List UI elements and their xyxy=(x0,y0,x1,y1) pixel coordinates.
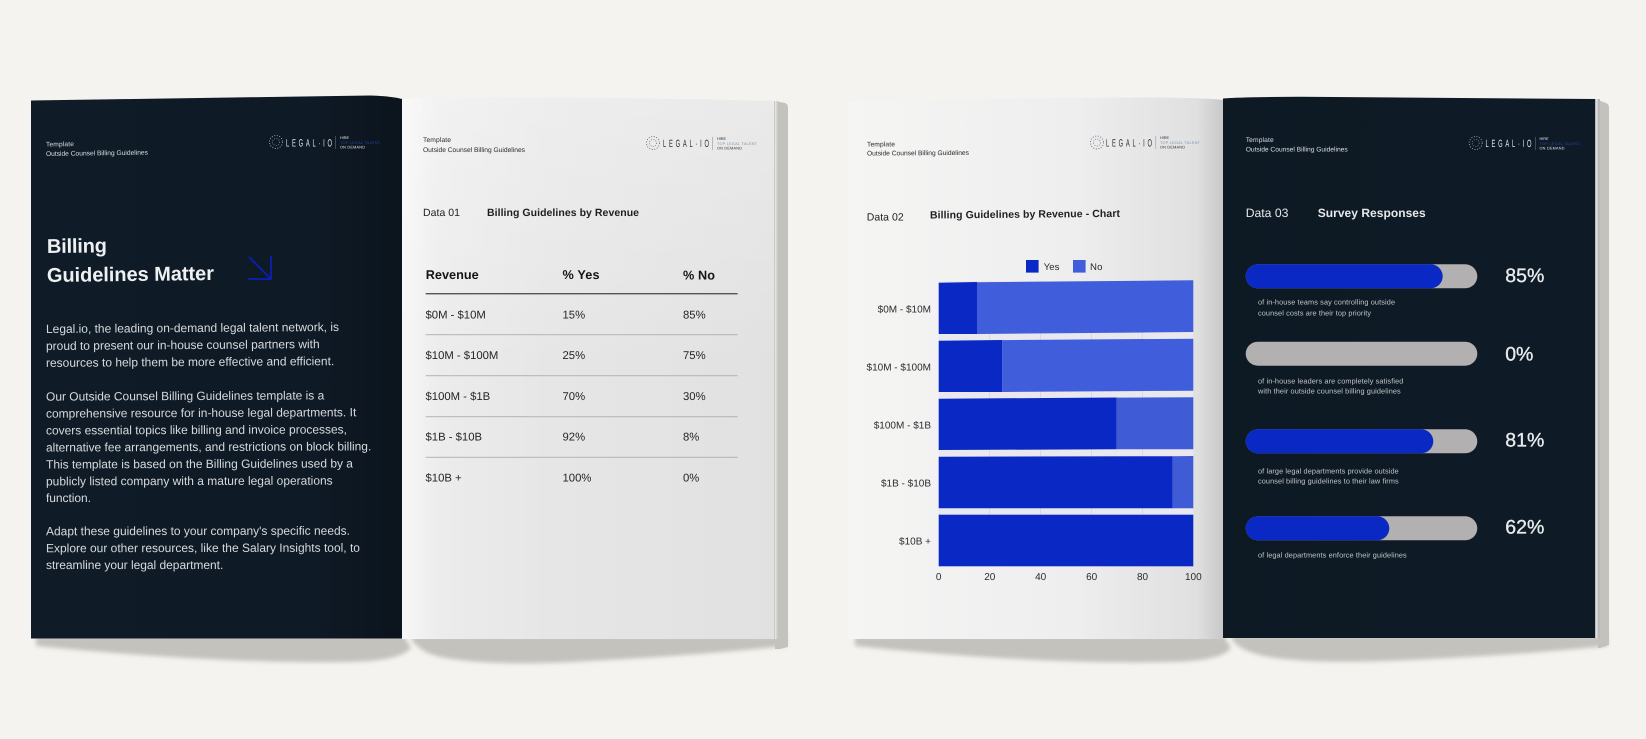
bar: $10M - $100M xyxy=(939,339,1193,392)
category labels: $0M - $10M xyxy=(878,305,931,316)
shadow: spread 2 xyxy=(855,100,1609,662)
heading: Guidelines Matter xyxy=(47,263,214,287)
logo xyxy=(270,136,381,150)
category labels: $100M - $1B xyxy=(874,421,931,432)
table: billing guidelines by revenue: % No xyxy=(683,268,715,282)
table: billing guidelines by revenue: % Yes xyxy=(562,268,600,282)
bar: $0M - $10M xyxy=(939,280,1193,334)
text block: intro: Explore our other resources, like the Salary Insights tool, to xyxy=(46,541,360,555)
x axis labels: 0 xyxy=(936,572,942,583)
logo: TOP LEGAL TALENT xyxy=(717,142,758,146)
table: billing guidelines by revenue: 70% xyxy=(562,391,585,403)
logo: HIRE xyxy=(1160,136,1169,140)
page header text xyxy=(1246,137,1348,154)
stat: 85%: of in-house teams say controlling outside xyxy=(1258,298,1395,307)
logo: LEGAL·IO xyxy=(663,138,709,150)
stat: 0%: 0% xyxy=(1505,344,1533,366)
text block: intro: Adapt these guidelines to your company's specific needs. xyxy=(46,524,350,538)
table: billing guidelines by revenue: $100M - $1B xyxy=(426,391,490,403)
page header text: Outside Counsel Billing Guidelines xyxy=(46,150,149,158)
x axis labels xyxy=(936,572,1202,583)
logo: HIRE xyxy=(1540,137,1549,141)
logo: LEGAL·IO xyxy=(1106,138,1152,150)
logo: ON DEMAND xyxy=(340,146,365,150)
logo xyxy=(1469,136,1580,150)
logo xyxy=(1090,136,1201,150)
page header text: Template xyxy=(46,141,74,148)
bar: $1B - $10B xyxy=(939,456,1193,508)
text block: intro: proud to present our in-house counsel partners with xyxy=(46,337,320,353)
section heading: Survey Responses xyxy=(1318,206,1426,220)
logo: ON DEMAND xyxy=(1160,146,1185,150)
logo: HIRE xyxy=(340,136,349,140)
x axis labels: 80 xyxy=(1137,572,1148,583)
table: billing guidelines by revenue: 100% xyxy=(562,473,591,485)
stat: 62% xyxy=(1246,516,1544,560)
stat: 0%: with their outside counsel billing guidelines xyxy=(1257,386,1401,395)
section heading: Data 01 xyxy=(423,207,460,219)
heading: Billing xyxy=(47,235,107,258)
bar: $100M - $1B xyxy=(939,397,1193,450)
panel: dark intro page xyxy=(31,96,402,638)
category labels xyxy=(867,305,931,547)
logo: TOP LEGAL TALENT, xyxy=(1540,142,1580,146)
text block: intro: function. xyxy=(46,491,91,505)
table: billing guidelines by revenue: 25% xyxy=(562,350,585,362)
table: billing guidelines by revenue: 0% xyxy=(683,473,699,485)
stat: 0%: of in-house leaders are completely satisfied xyxy=(1258,376,1403,385)
section heading: Data 03 xyxy=(1246,206,1289,220)
category labels: $10B + xyxy=(899,536,931,547)
page header text xyxy=(46,141,149,158)
table: billing guidelines by revenue: $1B - $10B xyxy=(426,432,482,444)
page header text: Outside Counsel Billing Guidelines xyxy=(867,150,970,157)
text block: intro: alternative fee arrangements, and restrictions on block billing. xyxy=(46,439,371,455)
page header text: Outside Counsel Billing Guidelines xyxy=(423,147,526,154)
stat: 81%: counsel billing guidelines to their law firms xyxy=(1258,476,1399,485)
chart plot background xyxy=(939,281,1193,566)
legend xyxy=(1026,260,1102,273)
table: billing guidelines by revenue: 15% xyxy=(562,310,585,322)
stat: 85%: 85% xyxy=(1505,265,1544,287)
text block: intro: streamline your legal department. xyxy=(46,558,223,572)
x axis labels: 100 xyxy=(1185,572,1202,583)
section heading: Billing Guidelines by Revenue xyxy=(487,207,639,219)
stat: 62%: of legal departments enforce their guidelines xyxy=(1258,551,1407,560)
bar: $10B + xyxy=(939,515,1193,566)
page header text: Template xyxy=(423,137,451,144)
table: billing guidelines by revenue: $10B + xyxy=(426,473,462,485)
x axis labels: 40 xyxy=(1035,572,1047,583)
x axis labels: 20 xyxy=(984,572,996,583)
panel: revenue table page xyxy=(402,97,778,639)
icon: arrow xyxy=(248,256,271,279)
table: billing guidelines by revenue: $10M - $100M xyxy=(426,350,498,362)
panel: survey responses page xyxy=(1223,97,1600,639)
table: billing guidelines by revenue xyxy=(426,268,738,485)
logo: ON DEMAND xyxy=(1540,146,1565,150)
text block: intro xyxy=(46,320,371,572)
stat: 62%: 62% xyxy=(1505,516,1544,538)
shadow: spread 1 xyxy=(36,101,788,663)
logo: TOP LEGAL TALENT, xyxy=(340,141,381,145)
section heading: Billing Guidelines by Revenue - Chart xyxy=(930,208,1121,221)
chart: stacked bars by revenue xyxy=(867,260,1202,583)
text block: intro: Our Outside Counsel Billing Guidelines template is a xyxy=(46,388,325,404)
stat: 81%: of large legal departments provide outside xyxy=(1258,466,1399,475)
logo: TOP LEGAL TALENT xyxy=(1160,141,1201,145)
text block: intro: publicly listed company with a mature legal operations xyxy=(46,474,333,488)
category labels: $1B - $10B xyxy=(881,479,931,490)
text block: intro: Legal.io, the leading on-demand legal talent network, is xyxy=(46,320,339,336)
page header text xyxy=(423,137,526,154)
x axis labels: 60 xyxy=(1086,572,1098,583)
page header text: Outside Counsel Billing Guidelines xyxy=(1246,147,1348,154)
logo: LEGAL·IO xyxy=(286,138,332,150)
logo: LEGAL·IO xyxy=(1486,138,1531,150)
stat: 0% xyxy=(1246,342,1533,395)
table: billing guidelines by revenue: 8% xyxy=(683,432,699,444)
section heading xyxy=(1246,206,1426,220)
table: billing guidelines by revenue: 30% xyxy=(683,391,706,403)
page header text xyxy=(867,141,970,157)
section heading: Data 02 xyxy=(867,212,904,224)
text block: intro: resources to help them be more effective and efficient. xyxy=(46,354,334,370)
text block: intro: covers essential topics like billing and invoice processes, xyxy=(46,422,347,438)
category labels: $10M - $100M xyxy=(867,363,931,374)
table: billing guidelines by revenue: Revenue xyxy=(426,268,479,282)
brochure spread 1 xyxy=(31,96,788,663)
brochure spread 2 xyxy=(848,97,1609,662)
table: billing guidelines by revenue: 85% xyxy=(683,310,706,322)
stat: 81%: 81% xyxy=(1505,430,1544,452)
legend: No xyxy=(1090,262,1102,273)
text block: intro: comprehensive resource for in-house legal departments. It xyxy=(46,405,357,421)
legend: Yes xyxy=(1044,262,1060,273)
table: billing guidelines by revenue: $0M - $10M xyxy=(426,310,486,322)
page header text: Template xyxy=(1246,137,1274,144)
stat: 85% xyxy=(1246,264,1544,317)
table: billing guidelines by revenue: 75% xyxy=(683,350,706,362)
logo xyxy=(646,136,758,150)
heading xyxy=(47,235,214,287)
text block: intro: This template is based on the Billing Guidelines used by a xyxy=(46,456,353,472)
logo: HIRE xyxy=(717,137,726,141)
page header text: Template xyxy=(867,141,895,148)
logo: ON DEMAND xyxy=(717,146,742,150)
panel: chart page xyxy=(848,98,1223,639)
stat: 81% xyxy=(1246,429,1544,485)
section heading xyxy=(867,208,1121,224)
stat: 85%: counsel costs are their top priority xyxy=(1258,308,1371,317)
table: billing guidelines by revenue: 92% xyxy=(562,432,585,444)
